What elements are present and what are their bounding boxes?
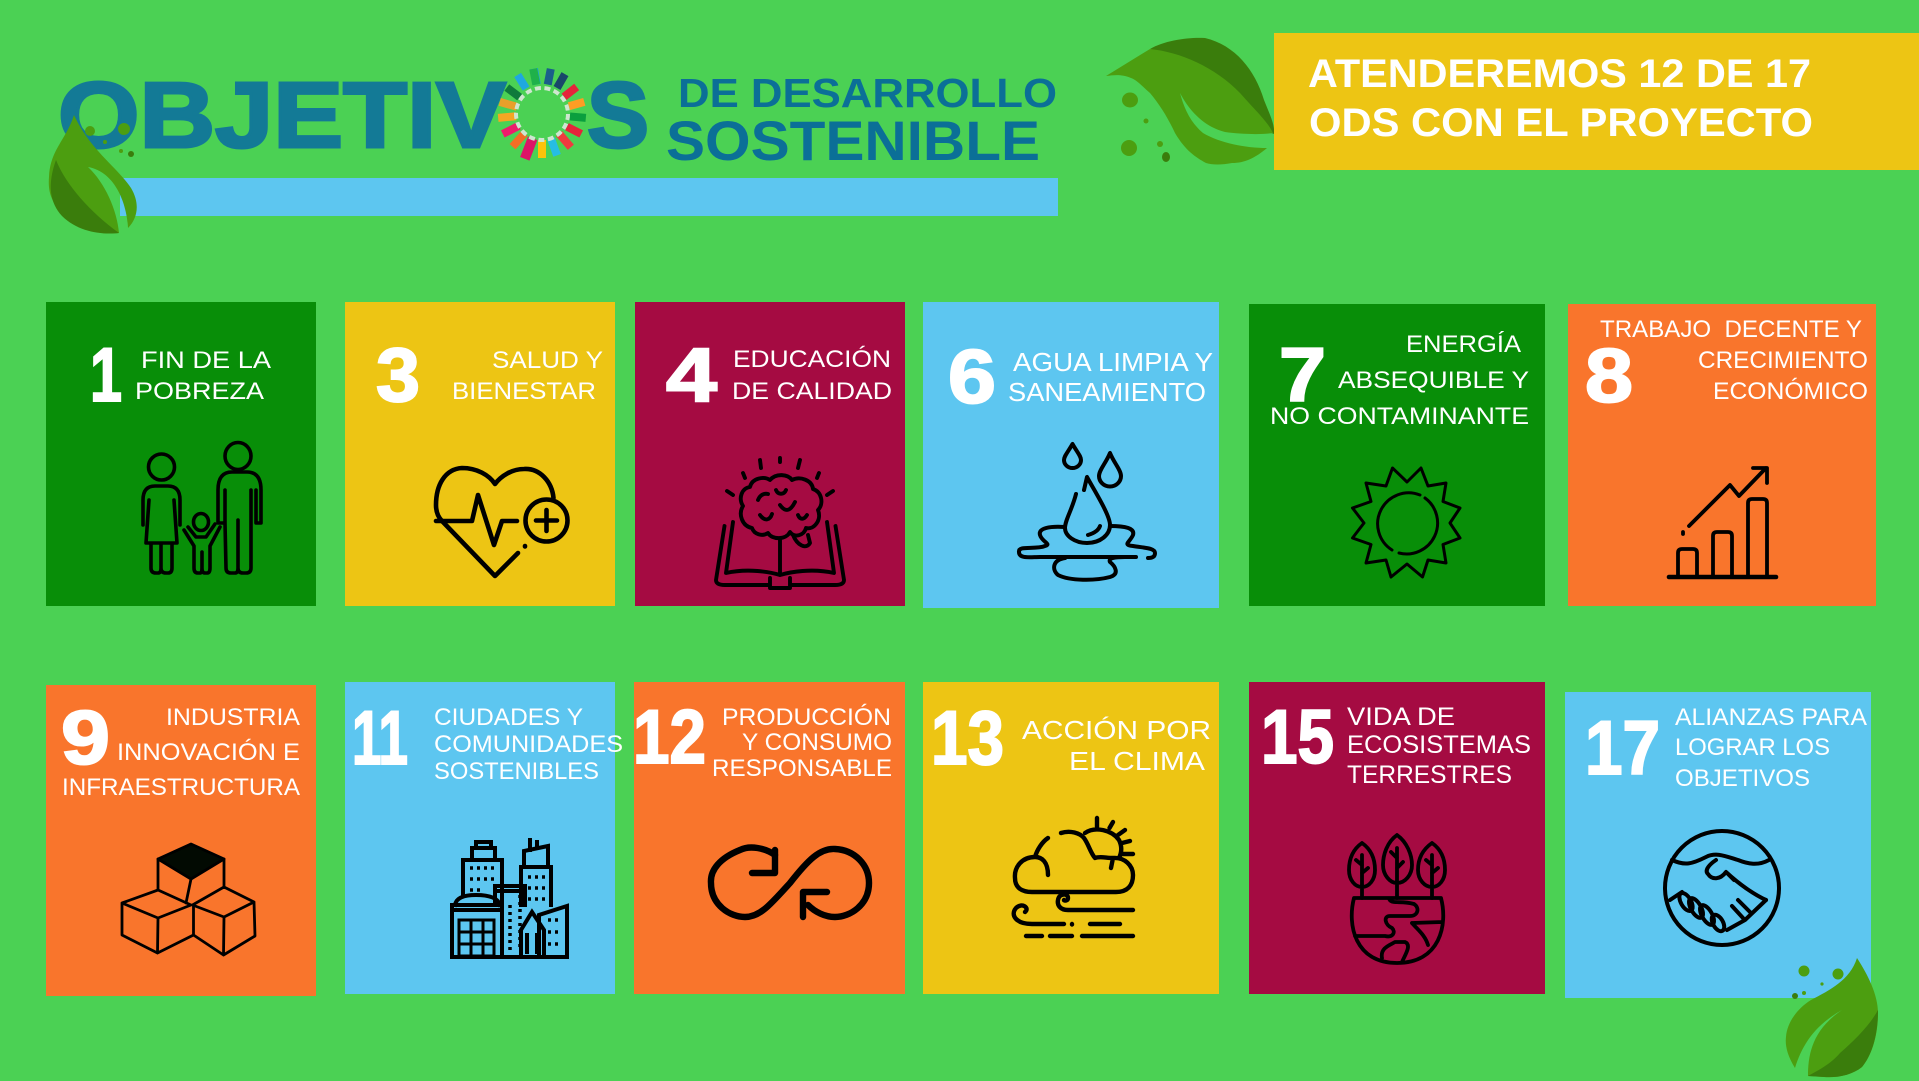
panel: goal 6 (923, 302, 1219, 608)
banner text: ODS CON EL PROYECTO (1309, 101, 1813, 145)
heading goal 12 (712, 704, 892, 782)
heading goal 9: INNOVACIÓN E (117, 739, 300, 766)
heading goal 12: PRODUCCIÓN (722, 704, 891, 731)
heading goal 9: INFRAESTRUCTURA (62, 774, 300, 801)
heading goal 7: ABSEQUIBLE Y (1338, 367, 1529, 394)
heading goal 15: TERRESTRES (1347, 761, 1512, 789)
panel: goal 15 (1249, 682, 1545, 994)
panel: goal 8 (1568, 304, 1876, 606)
heading goal 6: AGUA LIMPIA Y (1013, 347, 1213, 377)
icon: family (143, 442, 261, 573)
icon: cloud, sun and wind (1014, 818, 1133, 936)
heading goal 13: ACCIÓN POR (1022, 715, 1211, 745)
icon: stacked cubes (122, 844, 255, 955)
heading goal 1 (135, 347, 271, 405)
icon: rising bar chart (1669, 468, 1776, 577)
heading goal 6 (1008, 347, 1213, 407)
number 12: 12 (633, 695, 706, 780)
subtitle: Sostenible: SOSTENIBLE (666, 109, 1040, 172)
heading goal 8: TRABAJO DECENTE Y (1600, 316, 1862, 343)
heading goal 9: INDUSTRIA (166, 704, 300, 731)
heading goal 12: Y CONSUMO (742, 729, 892, 756)
number 8: 8 (1585, 334, 1633, 419)
number 1: 1 (90, 333, 122, 418)
heading goal 4 (732, 346, 892, 405)
heading goal 17: ALIANZAS PARA (1675, 704, 1867, 731)
number 17: 17 (1585, 706, 1660, 791)
title: Objetivos de Desarrollo Sostenible (58, 63, 1058, 216)
icon: brain over book (716, 458, 844, 588)
panel: goal 9 (46, 685, 316, 996)
panel: goal 1 (46, 302, 316, 606)
icon: heart with pulse (436, 468, 568, 576)
heading goal 17: OBJETIVOS (1675, 765, 1810, 792)
banner: Atenderemos 12 de 17 (1274, 33, 1919, 170)
heading goal 4: EDUCACIÓN (733, 346, 891, 373)
heading goal 7: ENERGÍA (1406, 331, 1521, 358)
panel: goal 12 (633, 682, 905, 994)
title word: Objetivos: OBJETIV (58, 63, 506, 167)
heading goal 13: EL CLIMA (1069, 746, 1206, 776)
heading goal 1: FIN DE LA (141, 347, 271, 374)
heading goal 9 (62, 704, 300, 801)
heading goal 7 (1270, 331, 1529, 430)
heading goal 17 (1675, 704, 1867, 792)
heading goal 11: COMUNIDADES (434, 731, 623, 758)
leaf: bottom right (1786, 958, 1878, 1077)
panel: goal 4 (635, 302, 905, 606)
icon: SDG colour wheel (498, 68, 586, 161)
heading goal 3: BIENESTAR (452, 378, 596, 405)
heading goal 15: VIDA DE (1347, 703, 1455, 731)
number 4: 4 (666, 333, 717, 418)
title bar (120, 178, 1058, 216)
banner text (1308, 52, 1813, 145)
panel: goal 17 (1565, 692, 1871, 998)
number 6: 6 (948, 335, 996, 420)
heading goal 8: ECONÓMICO (1713, 378, 1868, 405)
heading goal 11: SOSTENIBLES (434, 758, 599, 785)
panel: goal 7 (1249, 304, 1545, 606)
heading goal 12: RESPONSABLE (712, 755, 892, 782)
leaf: top right (1106, 38, 1274, 164)
icon: sun (1352, 468, 1460, 577)
heading goal 13 (1022, 715, 1211, 776)
heading goal 11 (434, 704, 623, 785)
heading goal 15 (1347, 703, 1531, 789)
number 11: 11 (352, 696, 408, 781)
heading goal 3: SALUD Y (492, 347, 603, 374)
banner background (1274, 33, 1919, 170)
leaf: top left (49, 115, 137, 234)
icon: trees on globe (1349, 835, 1445, 963)
icon: city skyline (452, 840, 567, 957)
banner text: ATENDEREMOS 12 DE 17 (1308, 52, 1811, 96)
icon: recycling infinity loop (711, 848, 869, 917)
heading goal 8: CRECIMIENTO (1698, 347, 1868, 374)
icon: handshake in circle (1665, 831, 1779, 945)
number 13: 13 (931, 696, 1004, 781)
heading goal 6: SANEAMIENTO (1008, 377, 1206, 407)
panel: goal 3 (345, 302, 615, 606)
heading goal 4: DE CALIDAD (732, 378, 892, 405)
heading goal 8 (1600, 316, 1868, 405)
icon: water drops and puddle (1019, 444, 1155, 580)
heading goal 11: CIUDADES Y (434, 704, 583, 731)
number 3: 3 (376, 333, 420, 418)
heading goal 17: LOGRAR LOS (1675, 734, 1830, 761)
number 15: 15 (1261, 695, 1334, 780)
panel: goal 13 (923, 682, 1219, 994)
heading goal 3 (452, 347, 603, 405)
heading goal 7: NO CONTAMINANTE (1270, 403, 1529, 430)
number 7: 7 (1279, 333, 1326, 418)
heading goal 1: POBREZA (135, 378, 264, 405)
number 9: 9 (61, 696, 110, 781)
title word: Objetivos (58, 63, 649, 167)
panel: goal 11 (345, 682, 623, 994)
title word: Objetivos: S (587, 63, 649, 167)
heading goal 15: ECOSISTEMAS (1347, 731, 1531, 759)
subtitle: De desarrollo: DE DESARROLLO (678, 70, 1057, 116)
